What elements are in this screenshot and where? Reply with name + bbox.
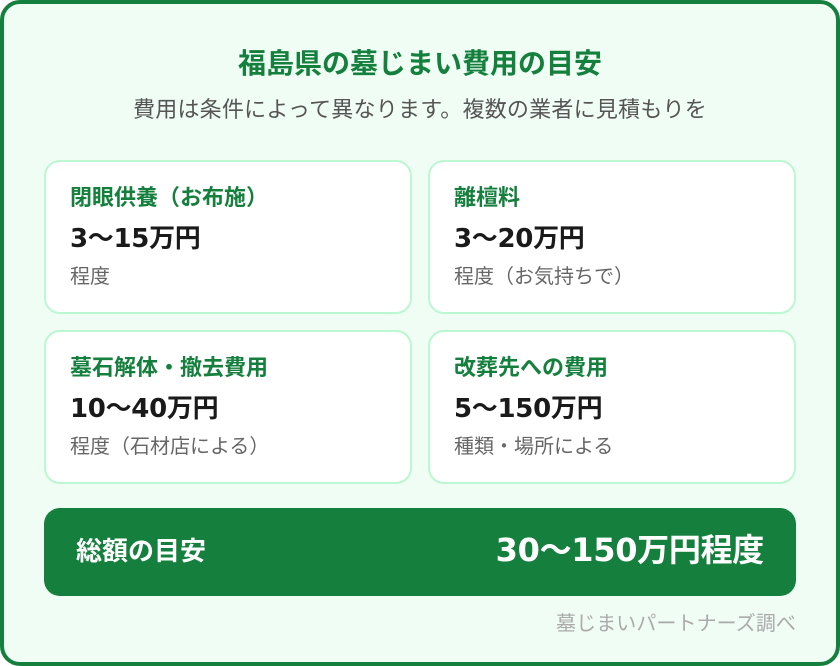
card value: 3〜20万円 xyxy=(454,224,584,254)
total label: 総額の目安 xyxy=(76,537,206,567)
card label: 閉眼供養（お布施） xyxy=(70,186,268,211)
subtitle: 費用は条件によって異なります。複数の業者に見積もりを xyxy=(133,98,707,123)
card note: 程度 xyxy=(70,264,110,288)
panel: card gravestone removal xyxy=(44,330,412,484)
panel: card temple leaving fee xyxy=(428,160,796,314)
card note: 程度（石材店による） xyxy=(70,434,269,458)
source note: 墓じまいパートナーズ調べ xyxy=(556,611,796,635)
card value: 3〜15万円 xyxy=(70,224,200,254)
card note: 種類・場所による xyxy=(454,434,613,458)
panel: card reburial destination xyxy=(428,330,796,484)
card label: 離檀料 xyxy=(454,186,520,211)
card label: 改葬先への費用 xyxy=(454,356,608,381)
panel: total estimate bar xyxy=(44,508,796,596)
card value: 10〜40万円 xyxy=(70,394,218,424)
card label: 墓石解体・撤去費用 xyxy=(70,356,268,381)
panel: card eye-closing offering xyxy=(44,160,412,314)
card note: 程度（お気持ちで） xyxy=(454,264,634,288)
title: 福島県の墓じまい費用の目安 xyxy=(238,47,602,80)
total value: 30〜150万円程度 xyxy=(496,531,764,569)
card value: 5〜150万円 xyxy=(454,394,602,424)
